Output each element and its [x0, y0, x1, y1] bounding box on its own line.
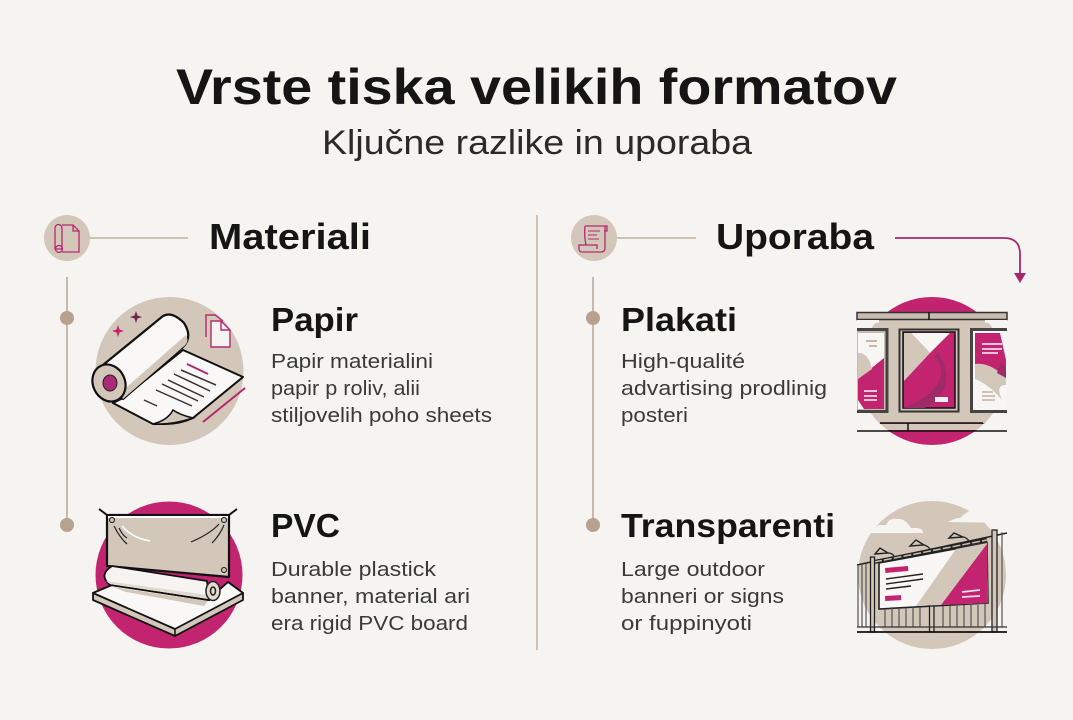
item: plakati text: posteri	[621, 404, 688, 427]
right poster	[971, 329, 1007, 412]
icon: uporaba header	[571, 215, 617, 261]
item: transparenti text: Large outdoor	[621, 558, 765, 581]
item: plakati text	[621, 301, 827, 427]
item: transparenti text	[621, 507, 835, 635]
item: papir text: Papir materialini	[271, 350, 433, 373]
left poster	[857, 329, 887, 412]
icon: billboard	[857, 501, 1010, 649]
subtitle: Ključne razlike in uporaba	[322, 124, 752, 162]
item: pvc text: era rigid PVC board	[271, 612, 468, 635]
panel: materiali	[44, 215, 492, 648]
item: papir text: papir p roliv, alii	[271, 377, 420, 400]
title: Vrste tiska velikih formatov	[176, 59, 897, 115]
item: transparenti text: or fuppinyoti	[621, 612, 752, 635]
item: pvc text: PVC	[271, 507, 340, 544]
item: plakati text: advartising prodlinig	[621, 377, 827, 400]
item: pvc text: banner, material ari	[271, 585, 470, 608]
item: plakati text: High-qualité	[621, 350, 745, 373]
heading: uporaba: Uporaba	[716, 216, 875, 257]
item: papir text: stiljovelih poho sheets	[271, 404, 492, 427]
item: pvc text: Durable plastick	[271, 558, 437, 581]
panel: uporaba	[571, 215, 1026, 649]
item: pvc text	[271, 507, 470, 635]
center poster	[900, 330, 958, 412]
item: papir text: Papir	[271, 301, 358, 338]
icon: materiali header	[44, 215, 90, 261]
arrow	[895, 238, 1026, 283]
icon: pvc banner and board	[93, 502, 243, 648]
item: transparenti text: banneri or signs	[621, 585, 784, 608]
item: plakati text: Plakati	[621, 301, 737, 338]
icon: paper roll	[86, 297, 245, 445]
item: papir text	[271, 301, 492, 427]
heading: materiali: Materiali	[209, 216, 371, 257]
item: transparenti text: Transparenti	[621, 507, 835, 544]
icon: poster wall	[850, 297, 1015, 445]
